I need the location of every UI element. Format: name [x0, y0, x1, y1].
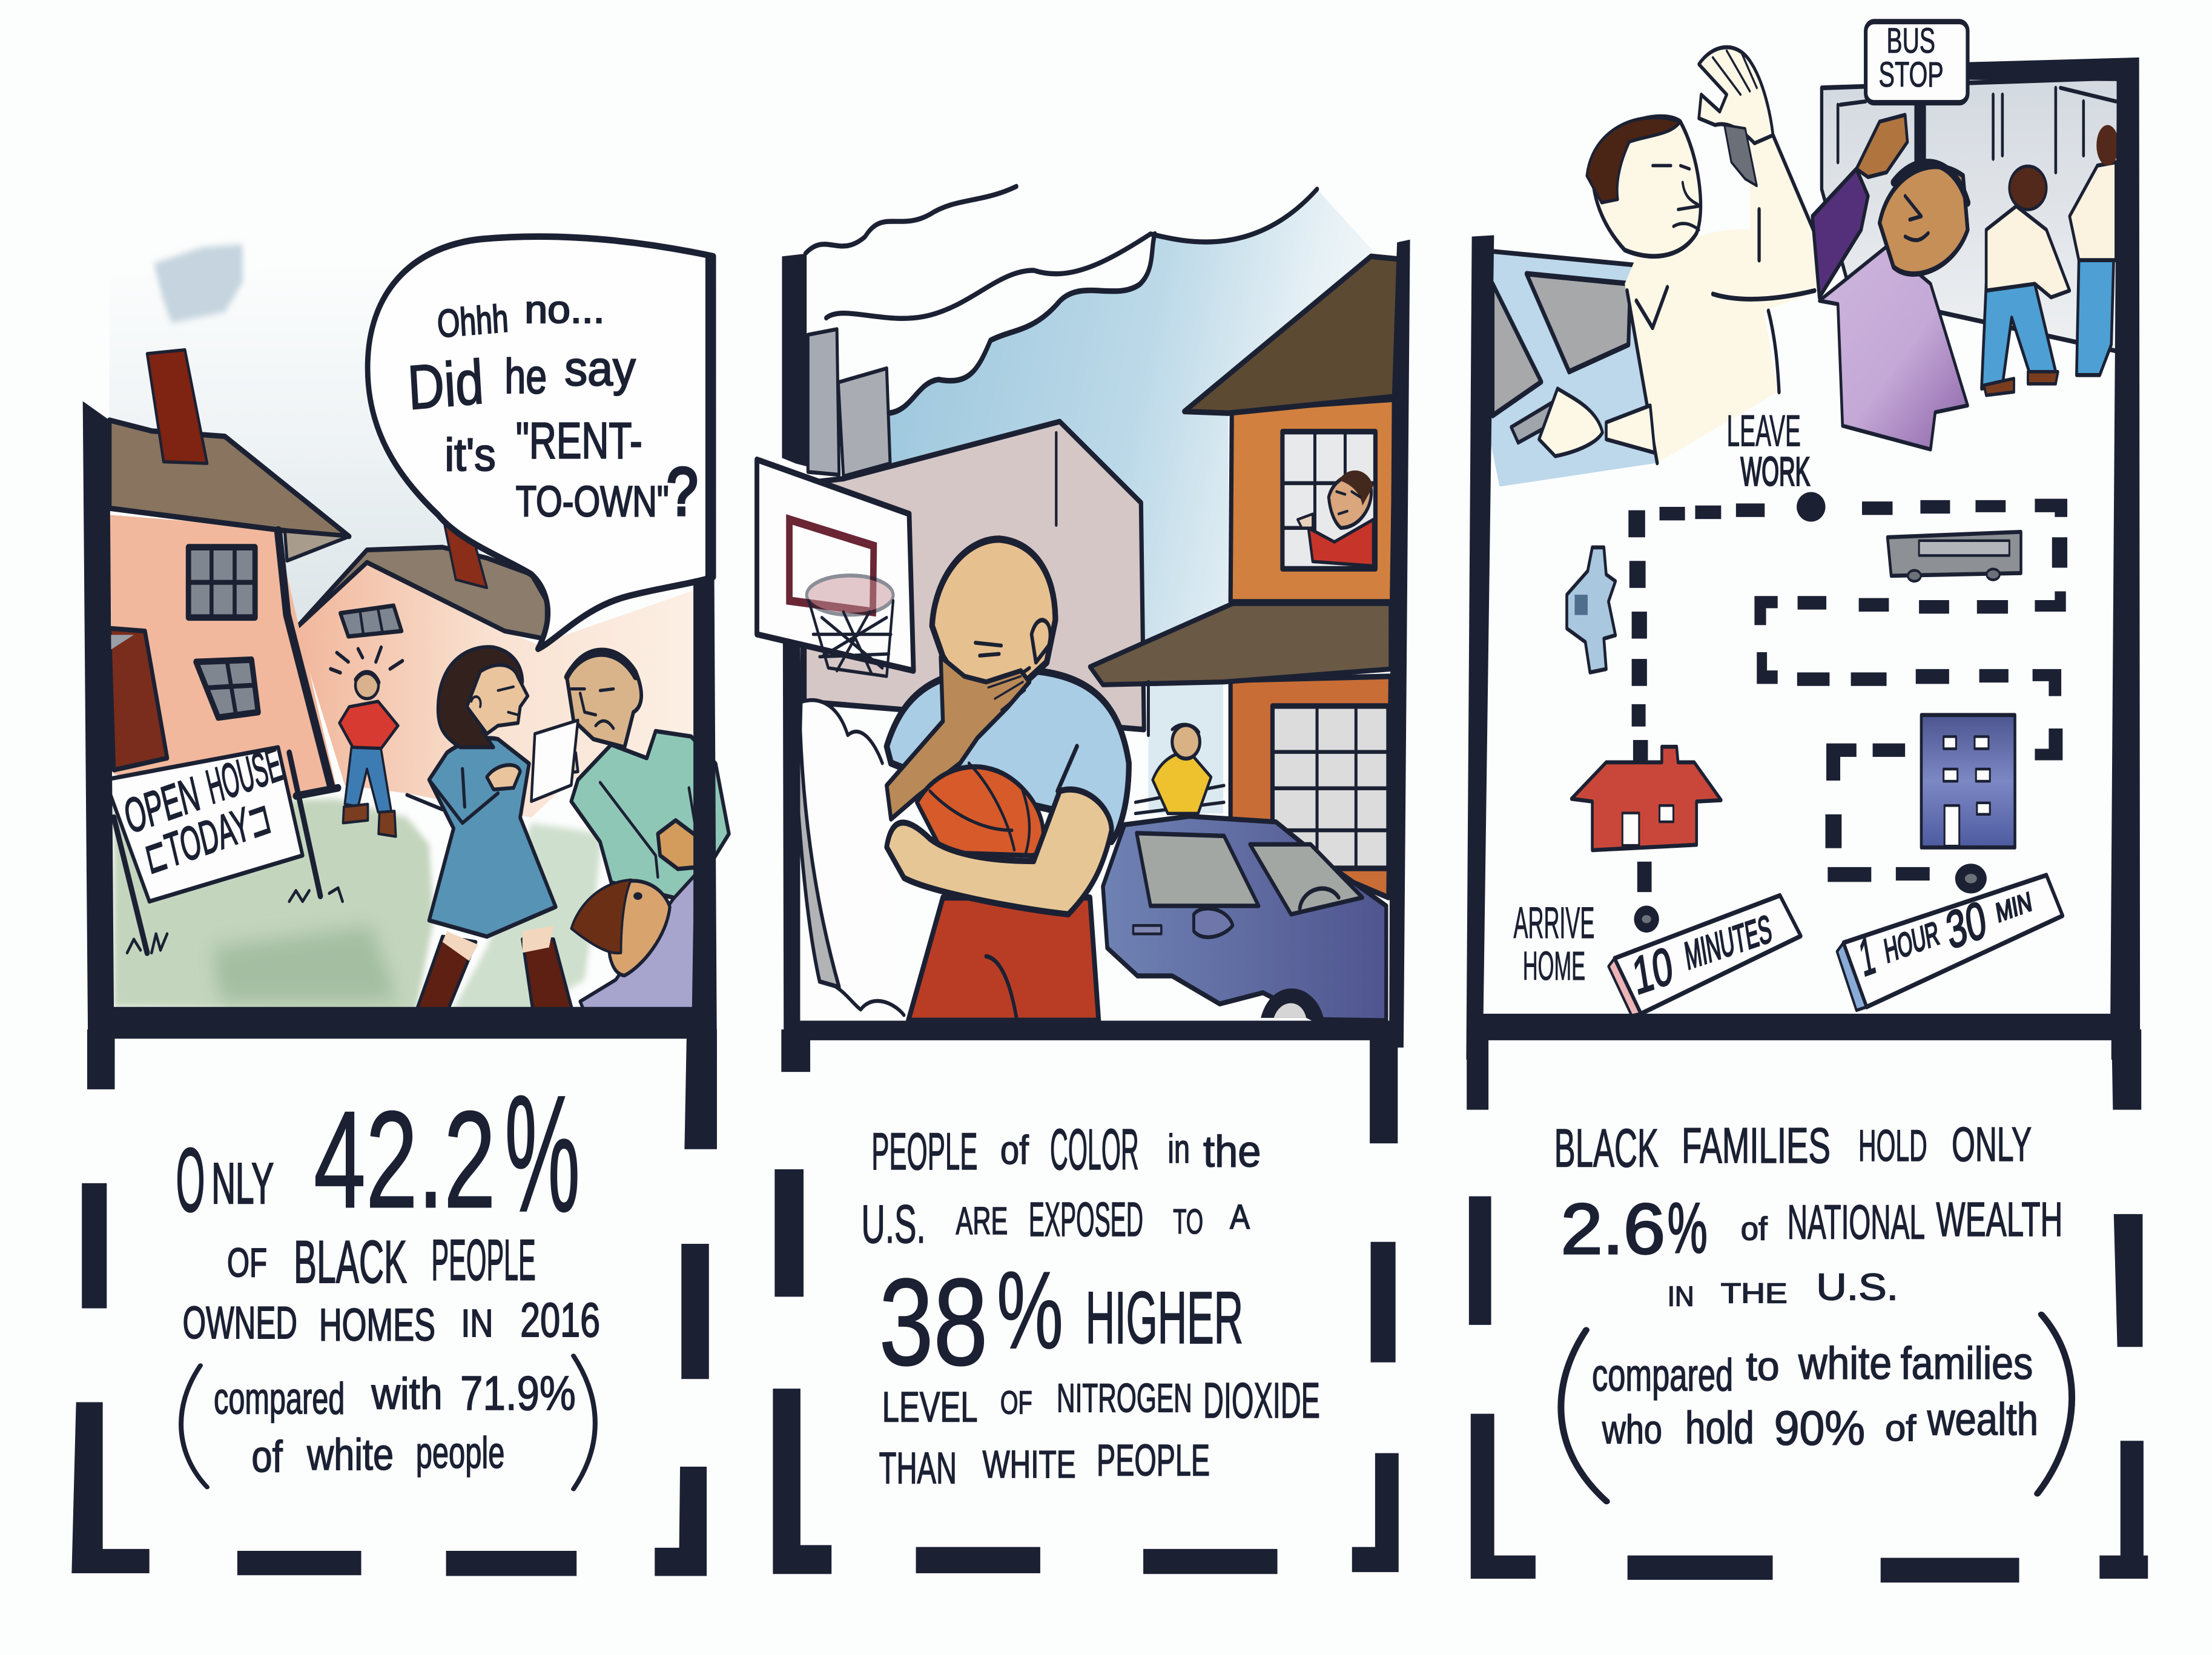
speech bubble: "RENT-	[516, 412, 642, 469]
tag: 1 hour 30 min: HOUR	[1881, 914, 1942, 971]
statistic: 2.6 percent of national wealth	[1561, 1188, 2062, 1269]
statistic: only 42.2 percent: O	[176, 1129, 205, 1230]
text: owned homes in 2016: OWNED	[183, 1298, 297, 1349]
lawn	[114, 799, 603, 1012]
icon: car	[1567, 547, 1616, 672]
tag: 10 minutes: 10	[1629, 935, 1677, 1006]
tag: 1 hour 30 min: MIN	[1994, 887, 2034, 929]
hoop pole	[783, 643, 904, 1026]
open house sign: ⊏TODAY⊐	[140, 790, 276, 885]
house upper floor	[1184, 256, 1399, 602]
text: U.S. are exposed to a: U.S.	[861, 1194, 926, 1255]
backboard and hoop	[757, 460, 914, 676]
tag: 1 hour 30 min: 30	[1942, 889, 1990, 960]
text: level of nitrogen dioxide: OF	[1000, 1384, 1032, 1421]
text: arrive home: ARRIVE	[1513, 899, 1594, 948]
paper held between them	[531, 720, 578, 801]
open house sign: OPEN	[119, 766, 204, 844]
text: comparison note in parentheses: families	[1901, 1338, 2033, 1389]
tag: 10 minutes	[1608, 896, 1801, 1016]
text: black families hold only: FAMILIES	[1682, 1117, 1831, 1174]
text: in the U.S.: IN	[1668, 1281, 1694, 1312]
text: than white people: PEOPLE	[1097, 1435, 1210, 1485]
child	[571, 874, 696, 1018]
text: leave work: WORK	[1740, 449, 1810, 494]
man in teal shirt	[551, 650, 729, 899]
speech bubble: he	[504, 349, 547, 404]
text: U.S. are exposed to a: TO	[1173, 1203, 1203, 1241]
text: owned homes in 2016	[183, 1293, 600, 1350]
open house sign: HOUSE	[202, 736, 286, 814]
bus stop sign	[1866, 21, 1967, 165]
man in purple waving	[1812, 115, 1967, 449]
text: U.S. are exposed to a	[861, 1193, 1250, 1255]
text: comparison note in parentheses: white	[306, 1429, 394, 1479]
statistic: 38 percent higher	[879, 1249, 1243, 1391]
text: comparison note in parentheses: compared	[1592, 1350, 1733, 1401]
text: comparison note in parentheses: of	[251, 1431, 283, 1481]
text: level of nitrogen dioxide: LEVEL	[882, 1384, 977, 1431]
text: U.S. are exposed to a: A	[1230, 1198, 1250, 1237]
text: people of color in the: in	[1167, 1127, 1190, 1172]
sky wash	[110, 245, 483, 629]
speech bubble: ?	[667, 454, 698, 529]
icon: home	[1571, 747, 1721, 850]
text: than white people: THAN	[879, 1443, 957, 1493]
car route dashed line	[1628, 492, 1826, 933]
text: leave work: LEAVE	[1727, 406, 1801, 456]
dashed frame	[1467, 1029, 2148, 1582]
text: owned homes in 2016: IN	[461, 1302, 493, 1345]
text: leave work	[1727, 406, 1810, 494]
text: black families hold only	[1554, 1117, 2032, 1178]
text: comparison note in parentheses: hold	[1685, 1403, 1754, 1453]
statistic: only 42.2 percent: 42.2	[314, 1082, 496, 1237]
grey building	[805, 421, 1144, 730]
panel: pollution caption: DIOXIDE	[1203, 1372, 1320, 1429]
text: owned homes in 2016: HOMES	[319, 1300, 435, 1350]
text: people of color in the	[871, 1117, 1261, 1181]
smoke lines	[805, 187, 1317, 413]
speech bubble: Ohhh	[436, 297, 509, 346]
speech bubble: Did	[406, 347, 485, 423]
icon: bus	[1887, 532, 2021, 581]
speech bubble: TO-OWN"	[516, 477, 669, 526]
small man in red	[331, 647, 403, 836]
text: comparison note in parentheses: of	[1885, 1408, 1917, 1449]
text: of black people: OF	[227, 1241, 267, 1286]
panel: homeownership illustration	[83, 237, 729, 1060]
bus stop sign: STOP	[1879, 55, 1944, 94]
panel: pollution caption	[773, 1029, 1399, 1574]
text: comparison note in parentheses: with	[371, 1369, 443, 1418]
tag: 10 minutes: MINUTES	[1682, 907, 1774, 978]
icon: office building	[1921, 715, 2015, 847]
comic frame	[782, 240, 1410, 1048]
text: comparison note in parentheses: who	[1602, 1407, 1662, 1453]
text: than white people: WHITE	[983, 1442, 1076, 1486]
statistic: 2.6 percent of national wealth: 2.6	[1561, 1189, 1665, 1269]
speech bubble	[368, 237, 713, 649]
bus stop building	[1821, 78, 2118, 351]
text: comparison note in parentheses	[1561, 1315, 2072, 1501]
panel: wealth caption	[1467, 1029, 2148, 1582]
text: comparison note in parentheses	[181, 1356, 595, 1489]
text: than white people	[879, 1435, 1210, 1493]
dashed frame	[773, 1029, 1399, 1574]
text: owned homes in 2016: 2016	[520, 1293, 600, 1347]
speech bubble: it's	[444, 429, 496, 480]
panel: homeownership caption	[71, 1029, 717, 1576]
text: arrive home	[1513, 899, 1594, 989]
comic frame	[1466, 58, 2140, 1060]
speech bubble: say	[564, 341, 636, 395]
text: black families hold only: ONLY	[1952, 1117, 2032, 1171]
panel: homeownership caption: %	[504, 1060, 580, 1246]
statistic: only 42.2 percent: NLY	[211, 1151, 274, 1215]
car with door	[1486, 251, 1657, 487]
sky wash	[889, 189, 1375, 668]
open house sign	[105, 736, 343, 953]
text: in the U.S.: THE	[1721, 1278, 1788, 1309]
text: comparison note in parentheses: 90%	[1774, 1401, 1865, 1455]
statistic: 2.6 percent of national wealth: %	[1668, 1188, 1708, 1268]
text: people of color in the: COLOR	[1050, 1117, 1139, 1181]
panel: air pollution illustration	[757, 187, 1410, 1048]
tag: 1 hour 30 min: 1	[1855, 925, 1879, 988]
statistic: 2.6 percent of national wealth: WEALTH	[1936, 1193, 2062, 1247]
text: black families hold only: BLACK	[1554, 1118, 1659, 1178]
panel: commute illustration	[1466, 21, 2140, 1060]
basketball player	[886, 539, 1129, 1021]
comic frame	[83, 256, 717, 1060]
text: comparison note in parentheses: white	[1798, 1338, 1892, 1389]
tag: 1 hour 30 min	[1837, 875, 2062, 1010]
text: in the U.S.	[1668, 1266, 1898, 1312]
statistic: 2.6 percent of national wealth: NATIONAL	[1788, 1195, 1925, 1249]
statistic: only 42.2 percent	[176, 1060, 580, 1246]
text: U.S. are exposed to a: EXPOSED	[1029, 1193, 1143, 1247]
text: of black people: BLACK	[294, 1229, 407, 1295]
parked car	[1103, 816, 1386, 1021]
dashed frame	[71, 1029, 717, 1576]
back house	[296, 526, 693, 818]
statistic: 2.6 percent of national wealth: of	[1741, 1211, 1768, 1247]
text: black families hold only: HOLD	[1858, 1120, 1927, 1171]
statistic: 38 percent higher: 38	[879, 1253, 988, 1391]
smokestacks	[808, 329, 890, 477]
text: people of color in the: PEOPLE	[871, 1122, 977, 1180]
panel: homeownership caption: PEOPLE	[431, 1227, 536, 1292]
big house	[110, 350, 349, 799]
bus route dashed line	[1754, 499, 2067, 893]
text: level of nitrogen dioxide	[882, 1372, 1320, 1431]
text: comparison note in parentheses: wealth	[1927, 1395, 2038, 1445]
man with car keys	[1539, 47, 1820, 463]
commuters walking	[1981, 125, 2119, 395]
panel: pollution caption: HIGHER	[1086, 1277, 1243, 1359]
speech bubble: no...	[524, 288, 604, 331]
text: comparison note in parentheses: to	[1746, 1344, 1780, 1389]
man in yellow on porch	[1135, 724, 1224, 813]
house lower floor	[1090, 604, 1390, 897]
text: comparison note in parentheses: compared	[214, 1373, 345, 1423]
text: arrive home: HOME	[1523, 944, 1585, 989]
text: in the U.S.: U.S.	[1816, 1266, 1898, 1308]
text: people of color in the: the	[1203, 1126, 1261, 1176]
text: people of color in the: of	[1000, 1128, 1029, 1173]
statistic: 38 percent higher: %	[997, 1249, 1063, 1372]
woman in blue dress	[407, 647, 573, 1015]
text: comparison note in parentheses: 71.9%	[460, 1367, 576, 1421]
text: level of nitrogen dioxide: NITROGEN	[1057, 1376, 1192, 1421]
text: U.S. are exposed to a: ARE	[956, 1199, 1008, 1243]
bus stop sign: BUS	[1887, 21, 1935, 61]
text: comparison note in parentheses: people	[416, 1427, 504, 1478]
